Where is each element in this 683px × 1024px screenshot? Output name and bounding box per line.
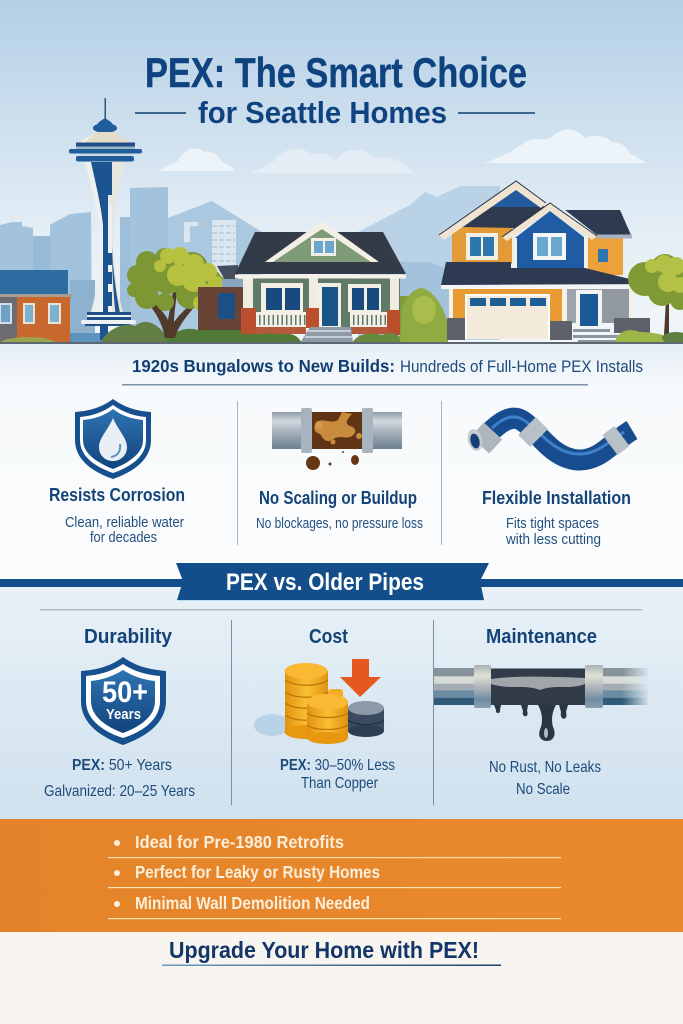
panel: cost: PEX: 30–50% Less [280,757,395,774]
subheading [122,356,643,386]
call to action: Upgrade Your Home with PEX! [169,937,479,963]
panel: resists corrosion: for decades [90,529,157,546]
sky background [0,0,683,346]
icon: 50+ years shield: Years [106,706,141,723]
bungalow house [198,221,406,343]
clouds [157,130,646,173]
panel: maintenance [434,626,650,798]
ground line [0,342,683,344]
list item: leaky homes: Perfect for Leaky or Rusty Homes [135,862,380,882]
panel: no scaling: No blockages, no pressure loss [256,515,423,532]
icon: flexible blue pipe [465,417,632,460]
banner: PEX vs. Older Pipes [0,563,683,601]
left brick building [0,270,72,353]
list item: retrofits: Ideal for Pre-1980 Retrofits [135,832,344,852]
panel: durability: Galvanized: 20–25 Years [44,783,195,800]
list item: demolition [108,893,561,919]
subheading: 1920s Bungalows to New Builds: [132,356,395,376]
list item: retrofits [108,832,561,858]
icon: shield with water drop [75,399,151,479]
panel: flexible installation: with less cutting [505,531,601,548]
panel: flexible installation [465,417,632,548]
right tree [628,254,683,344]
panel: cost: Than Copper [301,775,379,792]
panel: orange retrofit list [0,819,683,932]
title: for Seattle Homes [198,95,447,130]
seattle skyline [0,186,500,345]
panel: resists corrosion [49,399,185,546]
panel: no scaling: No Scaling or Buildup [259,488,417,508]
panel: resists corrosion: Clean, reliable water [65,514,184,531]
list item: leaky homes [108,862,561,888]
panel: cost: Cost [309,626,348,648]
panel: flexible installation: Flexible Installation [482,488,631,508]
panel: maintenance: Maintenance [486,626,597,648]
list item: demolition: Minimal Wall Demolition Needed [135,893,370,913]
title [135,49,535,130]
panel: cost [254,626,395,792]
panel: flexible installation: Fits tight spaces [506,515,599,532]
comparison section background [0,587,683,819]
panel: maintenance: No Rust, No Leaks [489,759,601,776]
panel: durability: PEX: 50+ Years [72,757,172,774]
panel: durability: Durability [84,626,173,648]
icon: 50+ years shield: 50+ [102,676,148,709]
panel: durability [44,626,195,800]
icon: leaking old pipe [434,665,650,741]
panel: no scaling [256,408,423,532]
space needle [69,98,142,340]
two story house [439,181,678,343]
panel: maintenance: No Scale [516,781,570,798]
icon: coins and down arrow [254,659,384,744]
green bush [400,288,448,342]
subheading: Hundreds of Full-Home PEX Installs [400,357,643,376]
icon: corroded pipe [272,408,402,470]
panel: resists corrosion: Resists Corrosion [49,485,185,505]
title: PEX: The Smart Choice [145,49,527,96]
banner: PEX vs. Older Pipes: PEX vs. Older Pipes [226,569,424,596]
tree and shrubs [100,247,302,343]
footer background [0,932,683,1024]
icon: 50+ years shield [81,657,166,745]
benefits section background [0,344,683,580]
